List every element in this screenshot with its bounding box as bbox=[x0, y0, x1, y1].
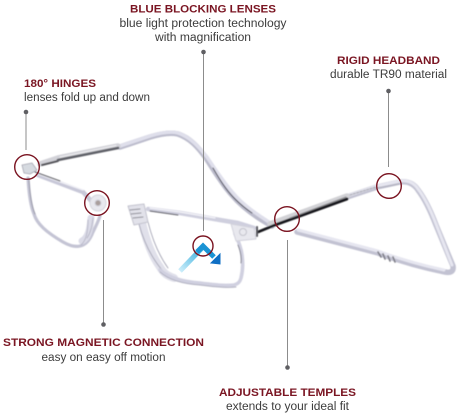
right lens frame bbox=[128, 204, 256, 287]
label: 180 degree hinges: lenses fold up and down bbox=[24, 92, 150, 104]
label: rigid headband bbox=[330, 55, 447, 81]
left lens frame bbox=[28, 172, 100, 246]
label: strong magnetic connection: STRONG MAGNETIC CONNECTION bbox=[3, 337, 204, 349]
headband temple bbox=[40, 132, 272, 226]
label: blue blocking lenses bbox=[120, 4, 287, 44]
label: adjustable temples bbox=[219, 387, 356, 413]
label: strong magnetic connection bbox=[3, 337, 204, 364]
label: blue blocking lenses: with magnification bbox=[154, 32, 251, 44]
icon: blue light arrow bbox=[180, 246, 220, 271]
label: blue blocking lenses: BLUE BLOCKING LENSES bbox=[130, 4, 276, 16]
label: strong magnetic connection: easy on easy off motion bbox=[42, 352, 166, 364]
label: adjustable temples: ADJUSTABLE TEMPLES bbox=[219, 387, 356, 399]
label: blue blocking lenses: blue light protection technology bbox=[120, 18, 287, 30]
glasses illustration bbox=[22, 132, 453, 287]
callout rings bbox=[15, 155, 401, 256]
label: 180 degree hinges: 180° HINGES bbox=[24, 78, 96, 90]
label: rigid headband: RIGID HEADBAND bbox=[337, 55, 440, 67]
label: 180 degree hinges bbox=[24, 78, 150, 104]
label: rigid headband: durable TR90 material bbox=[330, 69, 447, 81]
hinge and magnet details bbox=[22, 163, 106, 211]
label: adjustable temples: extends to your ideal fit bbox=[226, 401, 350, 413]
adjustable temple arm bbox=[257, 181, 453, 272]
leader lines bbox=[24, 50, 391, 370]
